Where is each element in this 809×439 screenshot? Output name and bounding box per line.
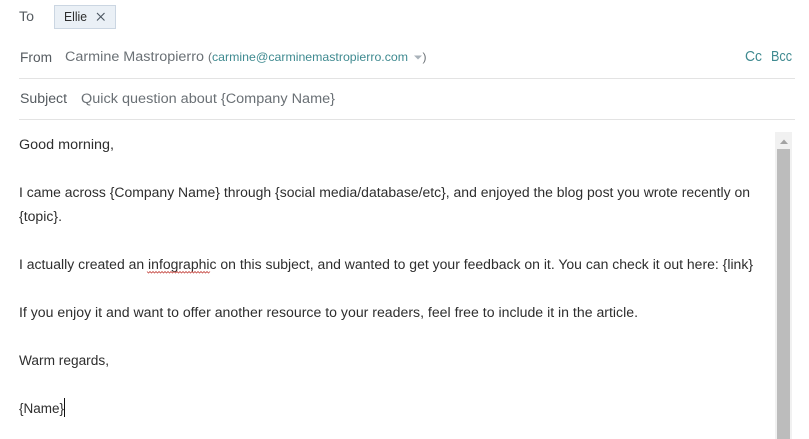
subject text: Quick question about {Company Name} xyxy=(81,91,336,106)
opening bracket: ( xyxy=(208,50,212,64)
from row xyxy=(20,49,792,65)
closing bracket: ) xyxy=(422,50,426,64)
recipient chip: Ellie: Ellie xyxy=(64,10,87,24)
sender dropdown arrow xyxy=(414,56,422,60)
to label: To xyxy=(19,9,34,24)
paragraph: offer: If you enjoy it and want to offer another resource to your readers, feel free to include it in the article. xyxy=(19,305,638,320)
paragraph: introduction xyxy=(19,185,750,224)
signature with text cursor: {Name} xyxy=(19,401,64,416)
sender email: carmine@carminemastropierro.com xyxy=(212,50,408,64)
from label: From xyxy=(20,50,52,65)
sign-off: Warm regards, xyxy=(19,353,109,368)
paragraph: introduction: {topic}. xyxy=(19,209,62,224)
subject row xyxy=(20,91,336,106)
greeting: Good morning, xyxy=(19,137,114,152)
paragraph: introduction: I came across {Company Name} through {social media/database/etc}, and enjoyed the blog post you wrote recently on xyxy=(19,185,750,200)
subject label: Subject xyxy=(20,91,67,106)
cc link: Cc xyxy=(745,49,762,65)
scrollbar xyxy=(775,132,792,439)
paragraph: infographic: I actually created an infographic on this subject, and wanted to get your feedback on it. You can check it out here: {link} xyxy=(19,257,753,272)
to row xyxy=(19,6,116,28)
bcc link: Bcc xyxy=(771,49,792,65)
sender name: Carmine Mastropierro xyxy=(65,49,204,64)
email body xyxy=(19,137,753,417)
